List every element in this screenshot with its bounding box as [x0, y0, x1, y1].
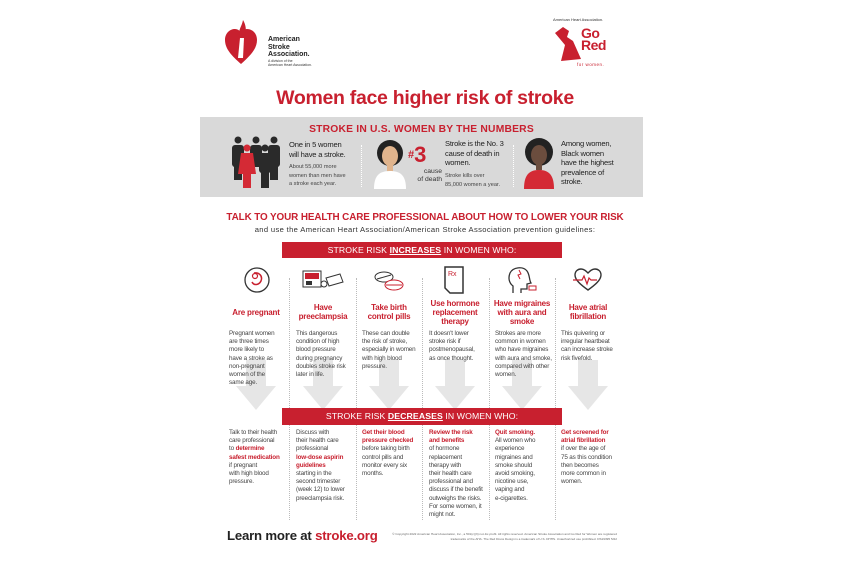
icon: woman: [374, 140, 406, 189]
body: risk decreases: Talk to their health: [229, 429, 277, 436]
panel: stroke by the numbers: women.: [445, 158, 470, 167]
icon: pregnant: [244, 267, 270, 293]
text: guidelines: [296, 462, 326, 469]
text: black women: stroke.: [561, 177, 582, 186]
text: stroke risk if: [429, 338, 460, 345]
text: black women: prevalence of: [561, 168, 604, 177]
text: migraines and: [495, 454, 533, 461]
panel: stroke by the numbers: women than men have: [289, 172, 346, 178]
text: black women: [561, 139, 614, 186]
text: Review the risk: [429, 429, 473, 436]
text: discuss if the benefit: [429, 486, 483, 493]
text: can increase stroke: [561, 346, 613, 353]
text: irregular heartbeat: [561, 338, 610, 345]
text: then becomes: [561, 462, 599, 469]
text: might not.: [429, 511, 455, 518]
body: risk increases: same age.: [229, 379, 257, 386]
text: women.: [561, 478, 582, 485]
panel: stroke by the numbers: 85,000 women a year.: [445, 182, 500, 188]
text: Have: [314, 303, 332, 312]
bar: risk decreases: STROKE RISK DECREASES IN WOMEN WHO:: [326, 411, 518, 421]
text: replacement: [429, 454, 462, 461]
text: Get their blood: [362, 429, 405, 436]
text: blood pressure: [296, 346, 336, 353]
text: compared with other: [495, 363, 549, 370]
body: risk increases: have a stroke as: [229, 355, 273, 362]
icon: prescription: [444, 266, 464, 294]
body: risk decreases: care professional: [229, 437, 274, 444]
text: with aura and: [498, 308, 546, 317]
text: and benefits: [429, 437, 464, 444]
logo: american stroke association: American Heart Association.: [268, 63, 312, 67]
text: control pills and: [362, 454, 403, 461]
text: Have atrial: [569, 303, 607, 312]
bar: risk decreases: [282, 408, 562, 425]
logo: american stroke association: Association.: [268, 51, 310, 58]
body: risk decreases: with high blood: [229, 470, 269, 477]
panel: stroke by the numbers: cause: [424, 168, 442, 175]
body: risk decreases: [229, 429, 280, 485]
text: therapy with: [429, 462, 461, 469]
text: All women who: [495, 437, 535, 444]
text: Take birth: [371, 303, 407, 312]
text: nicotine use,: [495, 478, 528, 485]
footer: learn more: Learn more at stroke.org: [227, 528, 378, 543]
text: their health care: [296, 437, 339, 444]
text: one in 5: One in 5 women: [289, 140, 342, 149]
text: with aura and smoke,: [495, 355, 552, 362]
text: condition of high: [296, 338, 339, 345]
text: Quit smoking.: [495, 429, 535, 436]
text: e-cigarettes.: [495, 495, 528, 502]
text: if over the age of: [561, 445, 605, 452]
text: For some women, it: [429, 503, 482, 510]
text: Use hormone: [431, 299, 479, 308]
text: outweighs the risks.: [429, 495, 481, 502]
text: later in life.: [296, 371, 324, 378]
text: fibrillation: [570, 312, 606, 321]
panel heading: STROKE IN U.S. WOMEN BY THE NUMBERS: [309, 124, 534, 135]
text: avoid smoking,: [495, 470, 535, 477]
text: therapy: [441, 317, 469, 326]
text: professional and: [429, 478, 473, 485]
body: risk decreases: to determine: [229, 445, 264, 452]
text: This dangerous: [296, 330, 337, 337]
text: one in 5: will have a stroke.: [289, 150, 346, 158]
text: second trimester: [296, 478, 340, 485]
text: It doesn't lower: [429, 330, 469, 337]
logo: american stroke association: Stroke: [268, 44, 290, 50]
text: pressure checked: [362, 437, 413, 444]
text: black women: have the highest: [561, 158, 614, 167]
text: pressure.: [362, 363, 387, 370]
text: common in women: [495, 338, 546, 345]
text: Strokes are more: [495, 330, 541, 337]
panel: stroke by the numbers: About 55,000 more: [289, 164, 337, 170]
body: risk decreases: pressure.: [229, 478, 254, 485]
text: before taking birth: [362, 445, 410, 452]
text: monitor every six: [362, 462, 407, 469]
logo: go red for women: American Heart Association.: [553, 17, 603, 22]
text: (week 12) to lower: [296, 486, 345, 493]
text: especially in women: [362, 346, 416, 353]
logo: go red for women: Go: [581, 25, 599, 41]
text: of hormone: [429, 445, 459, 452]
text: the risk of stroke,: [362, 338, 407, 345]
text: risk fivefold.: [561, 355, 592, 362]
copyright: © Copyright 2022 American Heart Association, Inc., a 501(c)(3) not-for-profit. All rights reserved. American Stroke Association and Go Red for Women are registered trademarks of the AHA. The Red Dress Design is a trademark of U.S. DHHS. Unauthorized use prohibited. DS19395 5/22: [392, 532, 617, 540]
text: more common in: [561, 470, 606, 477]
text: Have migraines: [494, 299, 550, 308]
text: control pills: [368, 312, 410, 321]
icon: migraine: [508, 267, 536, 293]
body: risk increases: [229, 330, 275, 386]
icon: group of women: [232, 136, 280, 188]
text: vaping and: [495, 486, 524, 493]
text: postmenopausal,: [429, 346, 475, 353]
panel: stroke by the numbers: Stroke kills over: [445, 173, 484, 179]
text: Get screened for: [561, 429, 609, 436]
body: risk decreases: if pregnant: [229, 462, 257, 469]
bar: risk increases: STROKE RISK INCREASES IN WOMEN WHO:: [328, 245, 516, 255]
logo: go red for women: [553, 17, 606, 67]
logo: american stroke association: American: [268, 36, 300, 43]
text: starting in the: [296, 470, 332, 477]
text: who have migraines: [495, 346, 548, 353]
body: risk increases: non-pregnant: [229, 363, 265, 370]
icon: black woman: [524, 138, 554, 189]
text: replacement: [433, 308, 477, 317]
body: risk increases: are three times: [229, 338, 269, 345]
text: preeclampsia risk.: [296, 495, 344, 502]
body: risk increases: women of the: [229, 371, 265, 378]
text: black women: Among women,: [561, 139, 611, 148]
text: black women: Black women: [561, 149, 604, 158]
headings: risk increases: Are pregnant: [232, 308, 280, 317]
heading: talk to your health care professional: TALK TO YOUR HEALTH CARE PROFESSIONAL ABOUT HOW TO LOWER YOUR RISK: [226, 212, 624, 223]
text: This quivering or: [561, 330, 605, 337]
panel: stroke by the numbers: Stroke is the No. 3: [445, 139, 504, 148]
logo: american stroke association: A division of the: [268, 59, 293, 63]
stat: #3 cause of death: #3: [408, 142, 426, 167]
logo: american stroke association: [225, 20, 312, 67]
text: women.: [495, 371, 516, 378]
body: risk increases: Pregnant women: [229, 330, 275, 337]
panel: stroke by the numbers: cause of death in: [445, 148, 499, 158]
logo: go red for women: Red: [581, 37, 606, 53]
body: risk increases: more likely to: [229, 346, 264, 353]
text: their health care: [429, 470, 472, 477]
title: Women face higher risk of stroke: [276, 87, 574, 109]
arrows: [236, 360, 608, 410]
panel: stroke by the numbers: of death: [417, 176, 442, 182]
text: during pregnancy: [296, 355, 342, 362]
text: experience: [495, 445, 524, 452]
icon: heartbeat: [573, 268, 602, 291]
text: months.: [362, 470, 383, 477]
logo: go red for women: for women.: [577, 62, 604, 67]
text: professional: [296, 445, 328, 452]
icon: pills: [374, 272, 404, 290]
text: 75 as this condition: [561, 454, 612, 461]
subtitle: and use the American Heart Association/American Stroke Association prevention guidelines:: [255, 225, 595, 234]
text: preeclampsia: [299, 312, 347, 321]
text: one in 5: [289, 140, 346, 158]
icon: blood pressure: [302, 270, 344, 288]
body: risk decreases: safest medication: [229, 454, 280, 461]
bar: risk increases: [282, 242, 562, 258]
text: low-dose aspirin: [296, 454, 343, 461]
text: atrial fibrillation: [561, 437, 605, 444]
icon: prescription: Rx: [448, 271, 457, 278]
panel: stroke by the numbers: [200, 117, 643, 197]
panel: stroke by the numbers: a stroke each year.: [289, 181, 336, 187]
text: These can double: [362, 330, 410, 337]
text: smoke: [510, 317, 534, 326]
text: smoke should: [495, 462, 532, 469]
text: as once thought.: [429, 355, 473, 362]
text: doubles stroke risk: [296, 363, 346, 370]
text: Discuss with: [296, 429, 329, 436]
text: with high blood: [362, 355, 402, 362]
